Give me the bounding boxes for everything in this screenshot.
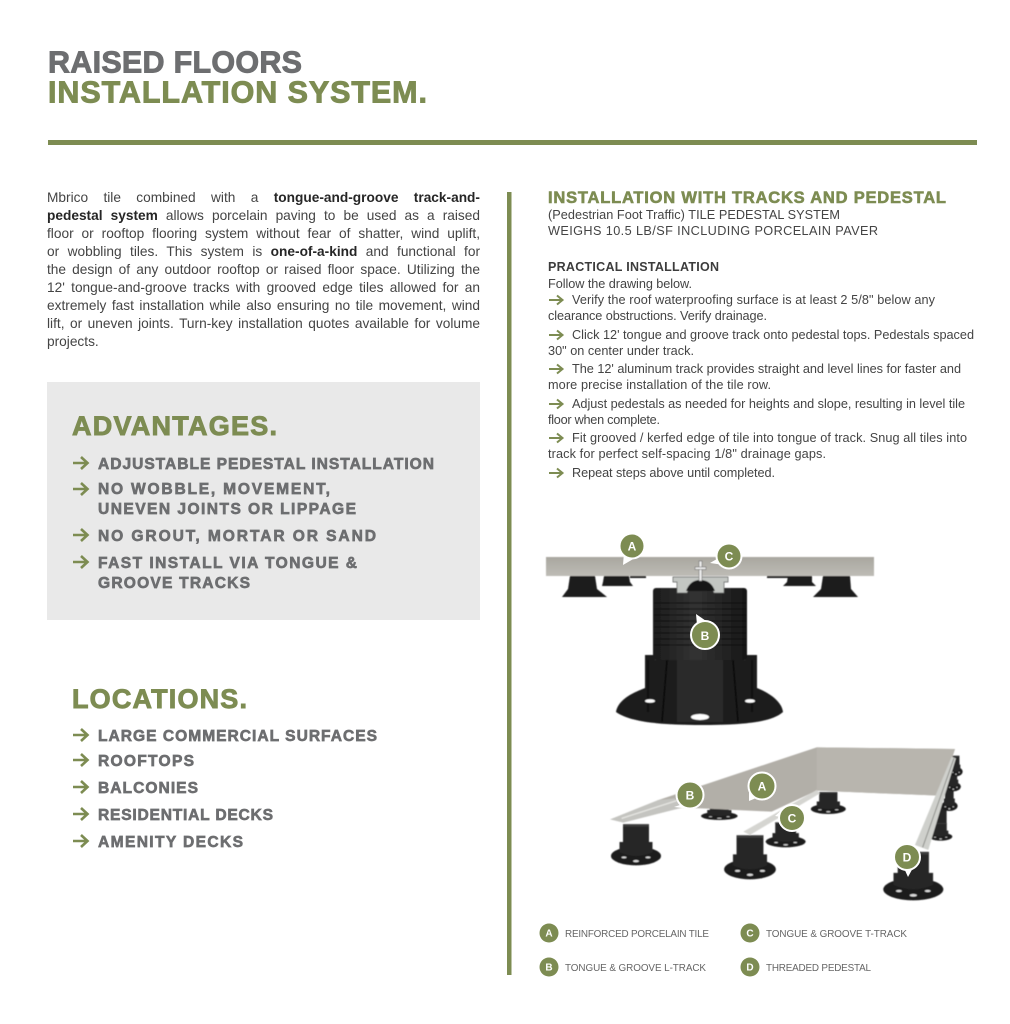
text block: practical installation: [548, 260, 974, 480]
heading: advantages: ADVANTAGES.: [72, 411, 277, 441]
list item: fast install: FAST INSTALL VIA TONGUE &: [98, 555, 357, 572]
text block: introduction: lift, or uneven joints. Turn-key installation quotes available for volume: [47, 316, 480, 331]
track: T-track: [743, 790, 820, 835]
callout: D: D: [903, 850, 912, 864]
legend item: B: TONGUE & GROOVE L-TRACK: [565, 963, 706, 974]
text block: introduction: floor or rooftop flooring system without fear of shatter, wind uplift,: [47, 226, 480, 241]
heading: installation with tracks and pedestal: INSTALLATION WITH TRACKS AND PEDESTAL: [548, 189, 946, 207]
legend item: A: A: [545, 928, 553, 940]
step: verify surface: [548, 293, 936, 323]
callout: A: [620, 534, 644, 565]
step: fit grooved edge: [548, 431, 967, 461]
heading: locations: LOCATIONS.: [72, 684, 247, 714]
step: click track: Click 12' tongue and groove track onto pedestal tops. Pedestals spaced: [572, 328, 974, 342]
callout: D: [894, 844, 920, 877]
legend item: A: [540, 924, 709, 942]
tile surface: [657, 747, 955, 812]
icon: main threaded pedestal: [616, 588, 783, 725]
legend item: C: [740, 924, 907, 942]
legend item: D: THREADED PEDESTAL: [766, 963, 872, 974]
text block: introduction: pedestal system allows porcelain paving to be used as a raised: [47, 208, 480, 223]
text block: system weight: [548, 208, 878, 238]
text block: introduction: Mbrico tile combined with a tongue-and-groove track-and-: [47, 190, 480, 204]
track: L-track: [610, 798, 683, 823]
step: adjust pedestals: floor when complete.: [548, 413, 660, 427]
step: verify surface: Verify the roof waterproofing surface is at least 2 5/8" below any: [572, 293, 936, 307]
list item: no wobble: [73, 481, 356, 518]
step: aluminum track: [548, 362, 961, 392]
step: fit grooved edge: Fit grooved / kerfed edge of tile into tongue of track. Snug all tiles into: [572, 431, 967, 445]
title: INSTALLATION SYSTEM.: [48, 76, 427, 110]
step: aluminum track: The 12' aluminum track provides straight and level lines for faster and: [572, 362, 961, 376]
list item: amenity decks: AMENITY DECKS: [98, 834, 243, 851]
text block: introduction: projects.: [47, 334, 99, 349]
legend: [540, 924, 907, 976]
step: aluminum track: more precise installation of the tile row.: [548, 378, 771, 392]
callout: C: C: [788, 812, 797, 826]
legend item: C: TONGUE & GROOVE T-TRACK: [766, 929, 907, 940]
callout: A: [748, 772, 776, 801]
diagram: cross-section of pedestal and tile: [546, 534, 874, 725]
list item: rooftops: ROOFTOPS: [98, 753, 194, 770]
list item: no wobble: NO WOBBLE, MOVEMENT,: [98, 481, 330, 498]
list item: adjustable pedestal installation: ADJUSTABLE PEDESTAL INSTALLATION: [98, 456, 434, 473]
list item: fast install: [73, 555, 357, 592]
track: right rail: [915, 757, 956, 850]
list item: no wobble: UNEVEN JOINTS OR LIPPAGE: [98, 501, 356, 518]
callout: B: [674, 782, 704, 809]
icon: rear pedestals: [701, 756, 963, 841]
text block: system weight: (Pedestrian Foot Traffic) TILE PEDESTAL SYSTEM: [548, 208, 840, 222]
panel: advantages: [47, 382, 480, 620]
legend item: B: B: [545, 962, 553, 974]
callout: A: A: [628, 540, 637, 554]
text block: practical installation: PRACTICAL INSTALLATION: [548, 260, 719, 274]
callout: A: A: [758, 780, 767, 794]
list item: no grout: NO GROUT, MORTAR OR SAND: [98, 528, 376, 545]
callout: C: [710, 544, 742, 568]
text block: practical installation: Follow the drawing below.: [548, 277, 692, 291]
callout: B: B: [701, 629, 710, 643]
step: adjust pedestals: [548, 397, 965, 427]
step: fit grooved edge: track for perfect self-spacing 1/8" drainage gaps.: [548, 447, 826, 461]
tile: [546, 557, 874, 576]
step: verify surface: clearance obstructions. Verify drainage.: [548, 309, 767, 323]
list item: residential decks: RESIDENTIAL DECKS: [98, 807, 273, 824]
step: adjust pedestals: Adjust pedestals as needed for heights and slope, resulting in level tile: [572, 397, 965, 411]
step: click track: 30" on center under track.: [548, 344, 694, 358]
text block: introduction: extremely fast installation while also ensuring no tile movement, wind: [47, 298, 480, 313]
diagram: perspective view of tracks and pedestals: [610, 747, 963, 900]
legend item: C: C: [746, 928, 754, 940]
title: [48, 46, 427, 110]
legend item: D: [740, 958, 872, 976]
list item: large commercial surfaces: LARGE COMMERCIAL SURFACES: [98, 728, 377, 745]
callout: C: [775, 805, 805, 831]
text block: introduction: or wobbling tiles. This system is one-of-a-kind and functional for: [47, 244, 480, 259]
text block: introduction: [47, 190, 480, 349]
text block: introduction: 12' tongue-and-groove tracks with grooved edge tiles allowed for an: [47, 280, 480, 295]
callout: B: B: [686, 788, 695, 802]
text block: system weight: WEIGHS 10.5 LB/SF INCLUDING PORCELAIN PAVER: [548, 224, 878, 238]
list item: balconies: BALCONIES: [98, 780, 198, 797]
icon: aluminum T-track: [673, 561, 728, 593]
text block: introduction: the design of any outdoor rooftop or raised floor space. Utilizing the: [47, 262, 480, 277]
icon: front pedestals: [611, 822, 943, 900]
legend item: B: [540, 958, 706, 976]
panel: locations: [72, 684, 377, 851]
legend item: A: REINFORCED PORCELAIN TILE: [565, 929, 709, 940]
step: click track: [548, 328, 974, 358]
title: RAISED FLOORS: [48, 46, 302, 80]
legend item: D: D: [746, 962, 754, 974]
list item: fast install: GROOVE TRACKS: [98, 575, 250, 592]
callout: C: C: [725, 550, 734, 564]
icon: back-row pedestals: [562, 576, 858, 597]
callout: B: [691, 614, 719, 649]
step: repeat: Repeat steps above until completed.: [572, 466, 775, 480]
